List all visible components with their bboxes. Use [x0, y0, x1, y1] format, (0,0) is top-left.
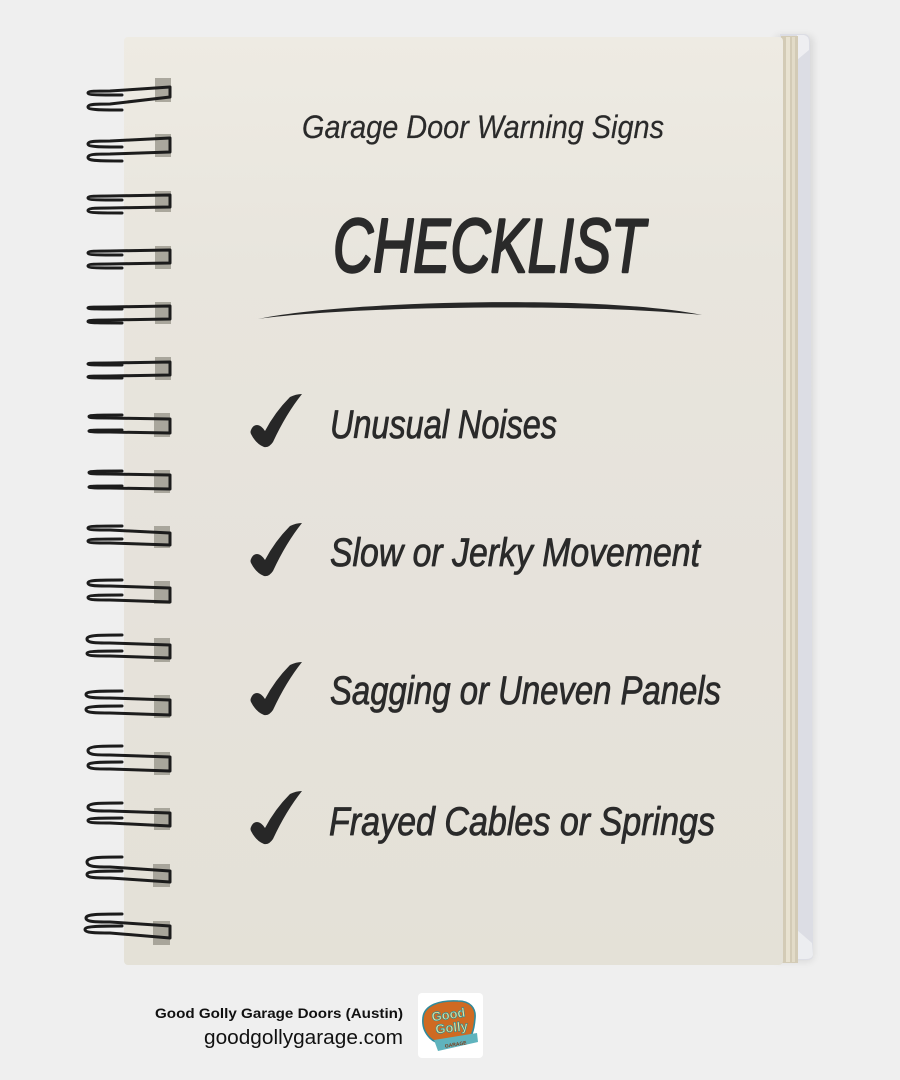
page edges [781, 36, 798, 963]
icon: check mark [250, 523, 302, 576]
item: Frayed Cables or Springs [250, 791, 715, 844]
footer website: goodgollygarage.com [204, 1027, 403, 1049]
logo [418, 993, 483, 1058]
logo: GARAGE [445, 1040, 468, 1050]
notebook [124, 34, 813, 965]
back cover [775, 34, 813, 961]
item: Unusual Noises [250, 394, 557, 447]
label: Sagging or Uneven Panels [330, 669, 721, 713]
footer company name: Good Golly Garage Doors (Austin) [155, 1005, 403, 1021]
label: Frayed Cables or Springs [329, 800, 715, 844]
item: Sagging or Uneven Panels [250, 662, 721, 715]
subtitle: Garage Door Warning Signs [302, 109, 664, 145]
label: Slow or Jerky Movement [330, 531, 702, 575]
icon: check mark [250, 662, 302, 715]
spiral binding [85, 78, 171, 945]
item: Slow or Jerky Movement [250, 523, 702, 576]
title: CHECKLIST [333, 204, 648, 289]
label: Unusual Noises [330, 403, 557, 447]
front page [124, 37, 783, 965]
icon: check mark [250, 791, 302, 844]
logo: Golly [435, 1018, 469, 1037]
icon: check mark [250, 394, 302, 447]
logo: Good [431, 1005, 466, 1024]
underline [258, 302, 702, 319]
